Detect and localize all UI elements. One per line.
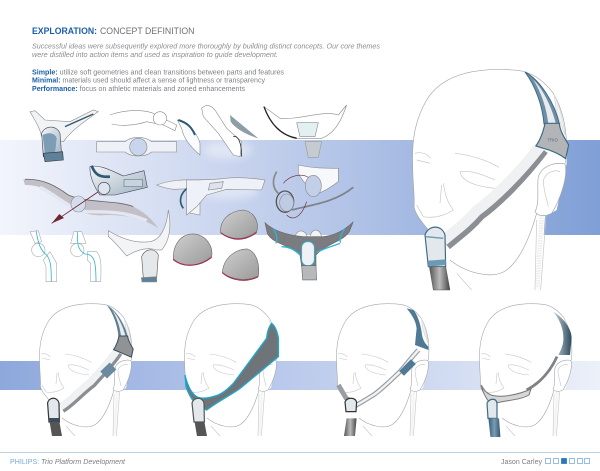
large head illustration <box>412 69 569 290</box>
sketch: wave strap with section <box>23 179 158 228</box>
page indicator <box>546 458 590 464</box>
core themes list <box>32 70 284 93</box>
sketch: flow diagram one <box>30 231 57 282</box>
footer author: Jason Carley <box>501 459 542 466</box>
upper strap <box>525 72 559 124</box>
footer rule <box>0 452 600 453</box>
side yoke with TRIO label <box>536 123 569 159</box>
sketches: centre column <box>173 105 353 280</box>
core themes list: Minimal: materials used should affect a sense of lightness or transparency <box>32 78 265 84</box>
sketch: ring and arm exploded <box>273 165 353 218</box>
footer left label: PHILIPS: Trio Platform Development <box>10 459 126 466</box>
lower blue band <box>0 361 600 390</box>
sketch: flow diagram two <box>71 232 101 282</box>
sketch: dome one <box>221 210 257 239</box>
concept 2 head with mesh band <box>184 304 278 436</box>
sketch: Y mask with cyan accents <box>265 222 353 280</box>
sketch: flat band with ring <box>97 137 177 156</box>
concept 1 head <box>39 304 133 436</box>
intro text: were distilled into action items and used as inspiration to guide development. <box>32 52 278 59</box>
intro text <box>32 44 381 59</box>
sketch: dark blade <box>230 115 258 138</box>
sketch: nasal mask corner <box>30 110 98 162</box>
sketch: nasal cushion top <box>264 105 347 157</box>
ribbed hose <box>429 267 450 290</box>
side yoke with TRIO label: TRIO <box>547 137 558 142</box>
sketches: left column <box>23 110 200 282</box>
soft white halos behind sketches <box>200 141 260 199</box>
sketch: finger clip <box>202 106 242 157</box>
title: CONCEPT DEFINITION <box>100 26 195 37</box>
sketch: side strap <box>187 178 265 215</box>
sketch: lower mask with curved arm <box>108 210 170 282</box>
sketch: blue elbow part <box>90 166 147 195</box>
sketch: hinge arm <box>110 111 177 131</box>
mid strap <box>443 147 542 243</box>
concept 4 head with back cap <box>479 304 572 437</box>
core themes list: Performance: focus on athletic materials and zoned enhancements <box>32 86 246 93</box>
mask elbow <box>425 227 446 267</box>
sketch: blade profile <box>177 120 200 155</box>
sketch: dome two <box>222 249 259 280</box>
core themes list: Simple: utilize soft geometries and clean transitions between parts and features <box>32 70 284 76</box>
title <box>32 26 195 37</box>
sketch: dome three <box>173 234 212 265</box>
concept 3 head with slim strap <box>336 304 429 436</box>
intro text: Successful ideas were subsequently explored more thoroughly by building distinct concepts. Our core themes <box>32 44 381 50</box>
top blue band <box>0 140 600 235</box>
title: EXPLORATION: <box>32 26 97 37</box>
sketch: strap with fins <box>157 180 200 215</box>
